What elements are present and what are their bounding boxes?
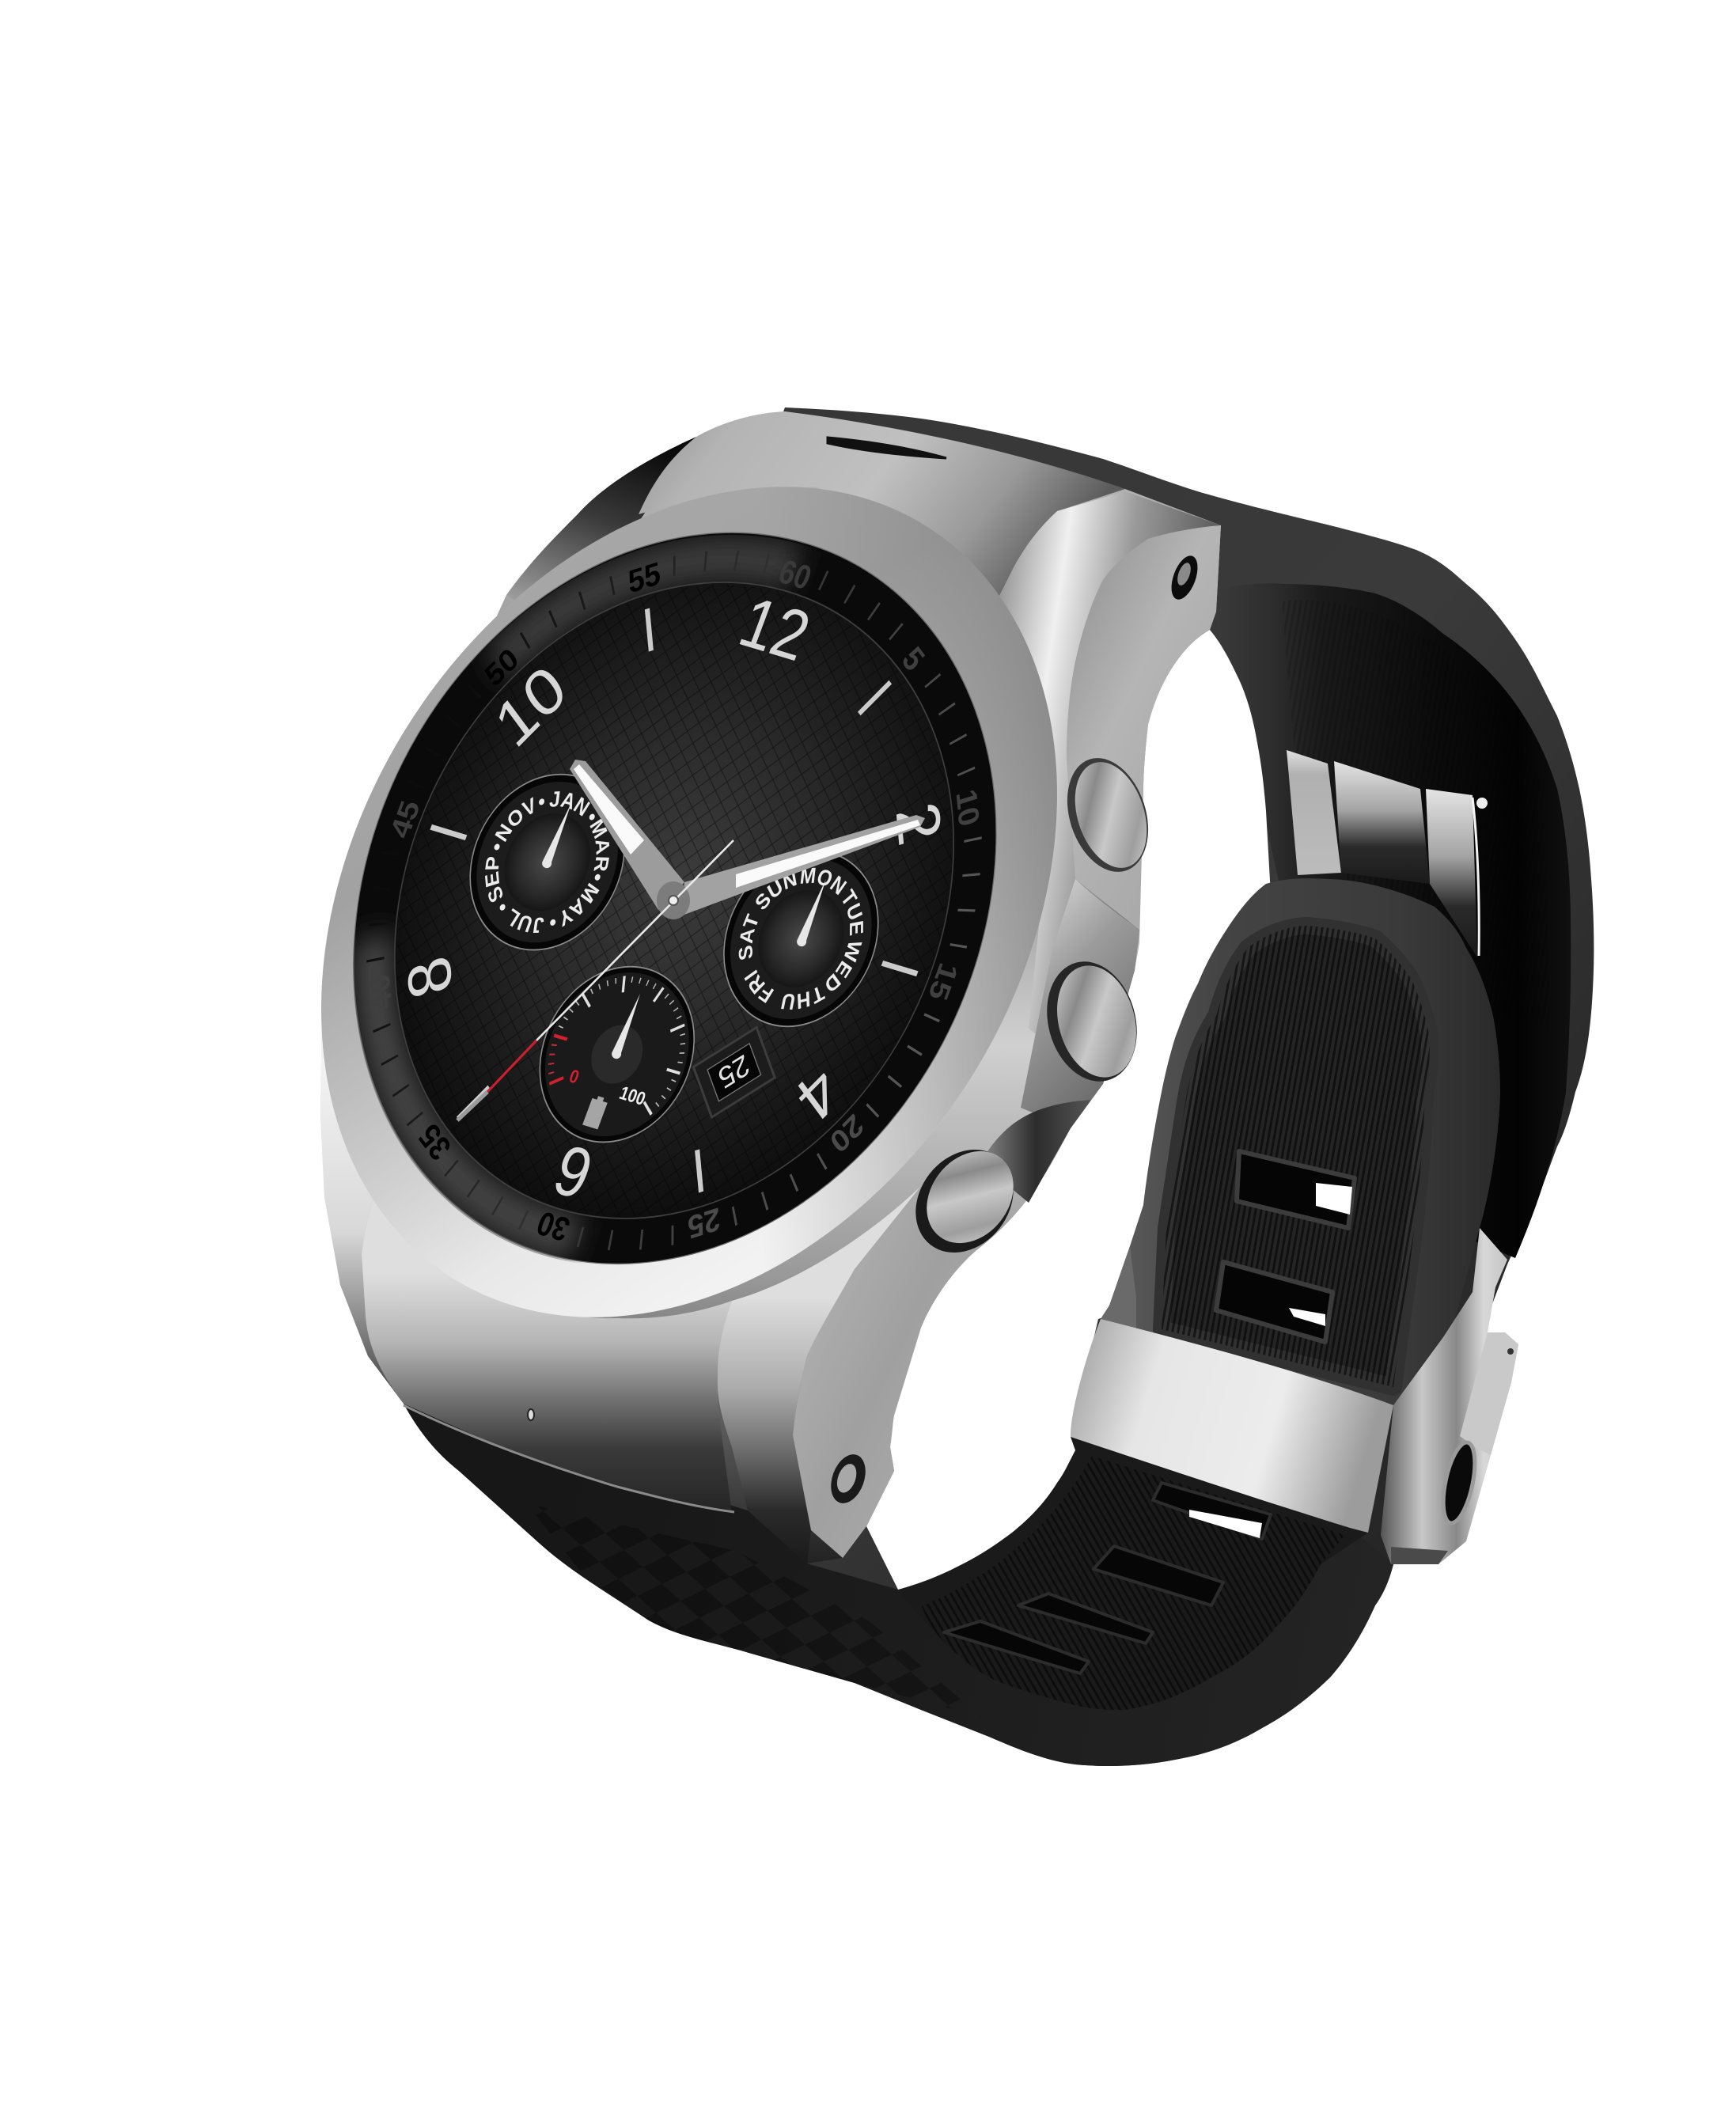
- strap: woven texture: [526, 1503, 981, 1717]
- watch case: [320, 411, 1221, 1563]
- battery major ticks: [549, 966, 707, 1118]
- case base: [320, 411, 1221, 1563]
- lower case ridge: [404, 1405, 734, 1512]
- minute 10: 10: [949, 786, 984, 831]
- buckle lower edge: [1391, 1547, 1448, 1564]
- strap: lower outer band: [404, 1404, 1393, 1766]
- date inset: [707, 1044, 761, 1101]
- slot 1 opening: [1189, 1510, 1262, 1538]
- bezel ring: [321, 394, 1057, 1410]
- weekday needle: [797, 879, 826, 946]
- tongue ribbed panel: [1162, 926, 1430, 1387]
- tongue slot lower opening: [1289, 1308, 1325, 1326]
- red tick: [549, 1078, 563, 1084]
- middle button: [1045, 957, 1148, 1086]
- label 100: 100: [616, 1082, 649, 1109]
- dial grid texture: [307, 517, 1041, 1283]
- tongue slot lower: [1216, 1262, 1332, 1342]
- minute 55: 55: [627, 556, 662, 601]
- red tick: [554, 1036, 567, 1040]
- label 0: 0: [567, 1065, 582, 1088]
- weekdays text band: [707, 841, 894, 1037]
- clasp segment middle: [1334, 761, 1430, 884]
- battery centre disc: [583, 1019, 651, 1090]
- minute hand highlight: [736, 820, 920, 888]
- strap: lower inner surface: [898, 1437, 1368, 1710]
- hour numerals: [322, 520, 1018, 1279]
- dark rim upper left: [506, 437, 696, 609]
- months labels: [485, 791, 609, 933]
- slot 2: [1094, 1546, 1223, 1605]
- white gap inside the strap: [866, 630, 1274, 1590]
- lower lug screw: [824, 1450, 872, 1508]
- minute 15: 15: [922, 959, 964, 1003]
- buckle: [1381, 1228, 1518, 1564]
- bar 11: [647, 608, 651, 651]
- keeper loop: [1071, 1319, 1393, 1533]
- sheen lower left: [353, 924, 590, 1264]
- battery face: [522, 955, 712, 1154]
- sheen upper left: [481, 535, 809, 684]
- lower lug plate: [793, 1186, 976, 1558]
- minute hand body: [682, 815, 925, 915]
- tongue rib lines: [1162, 926, 1430, 1387]
- minute 40: 40: [364, 970, 399, 1015]
- sub-dial: months: [469, 774, 625, 951]
- strap: rib lines: [1282, 600, 1551, 1029]
- crown buttons: [896, 748, 1162, 1272]
- minute numerals: [263, 472, 1085, 1328]
- clasp edge highlight: [1473, 798, 1479, 956]
- bar 7: [458, 1087, 489, 1119]
- battery red ticks: [537, 1036, 577, 1087]
- clasp hinge: [1287, 750, 1488, 957]
- top button socket: [1053, 748, 1162, 882]
- major tick: [667, 1070, 680, 1074]
- hour bars: [336, 572, 1012, 1229]
- MON: MON: [801, 867, 847, 896]
- upper case: [639, 411, 1125, 602]
- minute ticks: [279, 488, 1069, 1313]
- lower button: [909, 1134, 1031, 1260]
- watch dial: [353, 532, 1131, 1264]
- major tick: [670, 1025, 684, 1031]
- minute 5: 5: [896, 640, 931, 679]
- THU: THU: [781, 987, 826, 1010]
- minute 60: 60: [774, 553, 816, 597]
- numeral 2: 2: [883, 794, 955, 853]
- middle button socket: [1034, 951, 1150, 1092]
- dark reflection beside lower button: [980, 1100, 1091, 1203]
- date frame: [693, 1028, 775, 1117]
- bar 9: [431, 827, 466, 838]
- strap: upper inner surface: [1216, 583, 1571, 1258]
- polished shoulder: [996, 491, 1221, 1084]
- ring sheen: [353, 535, 809, 1264]
- strap slots: [944, 1483, 1271, 1673]
- strap: outer band: [404, 407, 1594, 1766]
- separator: •: [550, 919, 555, 926]
- NOV: NOV: [495, 797, 533, 842]
- numeral 6: 6: [544, 1129, 603, 1215]
- upper lug plate: [1067, 525, 1221, 930]
- major tick: [644, 1102, 651, 1115]
- MAR: MAR: [590, 818, 609, 871]
- bezel: [321, 394, 1057, 1410]
- minute 50: 50: [479, 642, 525, 693]
- battery minor ticks: [541, 964, 704, 1115]
- hour hand body: [570, 760, 684, 910]
- battery outer ring: [515, 948, 719, 1161]
- FRI: FRI: [744, 970, 774, 1003]
- minute 35: 35: [413, 1116, 457, 1167]
- major tick: [582, 994, 589, 1006]
- JAN: JAN: [549, 791, 590, 817]
- slot 1: [1153, 1483, 1271, 1539]
- left side slice: [320, 1000, 404, 1404]
- minute 25: 25: [686, 1200, 722, 1245]
- seconds hand tail: [457, 1092, 487, 1120]
- bar 1: [859, 682, 890, 714]
- polished mid piece: [718, 1186, 921, 1563]
- screw head: [1166, 552, 1203, 603]
- speaker slot: [828, 438, 946, 458]
- minute 45: 45: [385, 798, 426, 842]
- buckle side plate: [1460, 1332, 1518, 1455]
- separator: •: [595, 874, 601, 881]
- numeral 12: 12: [730, 582, 820, 677]
- tongue rim: [1101, 878, 1500, 1405]
- minute 20: 20: [824, 1108, 869, 1159]
- minute ring base: [250, 455, 1100, 1341]
- battery icon: [582, 1094, 608, 1129]
- bezel right shading: [321, 394, 1057, 1410]
- major tick: [623, 976, 624, 992]
- clasp segment right: [1426, 789, 1477, 957]
- months text band: [454, 764, 641, 960]
- WED: WED: [826, 942, 862, 991]
- months outer ring: [445, 756, 649, 968]
- slot 4: [944, 1621, 1089, 1673]
- separator: •: [539, 798, 544, 805]
- buckle rivet: [1507, 1348, 1514, 1355]
- separator: •: [494, 843, 500, 850]
- separator: •: [589, 813, 595, 820]
- MAY: MAY: [562, 883, 600, 927]
- minute 30: 30: [533, 1203, 574, 1248]
- strap: lower ribs: [922, 1456, 1345, 1710]
- battery needle: [612, 994, 640, 1059]
- lower button socket: [896, 1130, 1033, 1272]
- sub-dial: battery: [515, 948, 719, 1161]
- clasp segment left: [1287, 750, 1341, 875]
- date number: 25: [714, 1048, 753, 1095]
- screw slot: [1175, 561, 1193, 587]
- numeral 8: 8: [393, 948, 465, 1007]
- lower case: [362, 1198, 732, 1512]
- tongue slot upper opening: [1316, 1183, 1352, 1215]
- numeral 10: 10: [483, 651, 578, 761]
- hour hand highlight: [574, 764, 644, 855]
- screw slot: [833, 1461, 860, 1495]
- clasp pin: [1476, 798, 1488, 809]
- polished area below top button: [1021, 879, 1139, 1128]
- bar 3: [882, 963, 917, 974]
- SUN: SUN: [756, 874, 797, 910]
- buckle recess: [1438, 1440, 1480, 1525]
- sensor dot: [528, 1409, 534, 1420]
- buckle body: [1381, 1228, 1518, 1564]
- screw head: [824, 1450, 872, 1508]
- TUE: TUE: [843, 888, 863, 935]
- seconds hand tip: [536, 840, 733, 1040]
- months centre disc: [491, 803, 604, 921]
- SAT: SAT: [739, 913, 758, 960]
- tongue slot upper: [1237, 1151, 1355, 1228]
- separator: •: [500, 904, 506, 911]
- upper lug screw: [1166, 552, 1203, 603]
- bar 5: [697, 1150, 701, 1192]
- date window: [693, 1028, 775, 1117]
- clock hands: [457, 760, 925, 1120]
- weekdays outer ring: [699, 832, 903, 1045]
- sub-dial needles: [542, 803, 826, 1059]
- hub centre: [669, 896, 678, 905]
- sub-dial: weekdays: [723, 856, 879, 1027]
- JUL: JUL: [510, 908, 544, 933]
- month needle: [542, 803, 571, 868]
- keeper frame: [1101, 1246, 1136, 1329]
- weekdays centre disc: [745, 880, 858, 998]
- dial face: [305, 515, 1044, 1286]
- SEP: SEP: [485, 857, 503, 902]
- watch illustration: [320, 407, 1594, 1766]
- numeral 4: 4: [784, 1054, 852, 1136]
- strap tongue: [1101, 878, 1500, 1405]
- top button: [1063, 752, 1159, 877]
- weekdays labels: [739, 867, 863, 1010]
- hub: [657, 881, 690, 919]
- slot 3: [1018, 1594, 1153, 1643]
- major tick: [654, 987, 663, 1002]
- seconds hand red section: [487, 1040, 536, 1092]
- battery low ticks: [541, 1037, 568, 1082]
